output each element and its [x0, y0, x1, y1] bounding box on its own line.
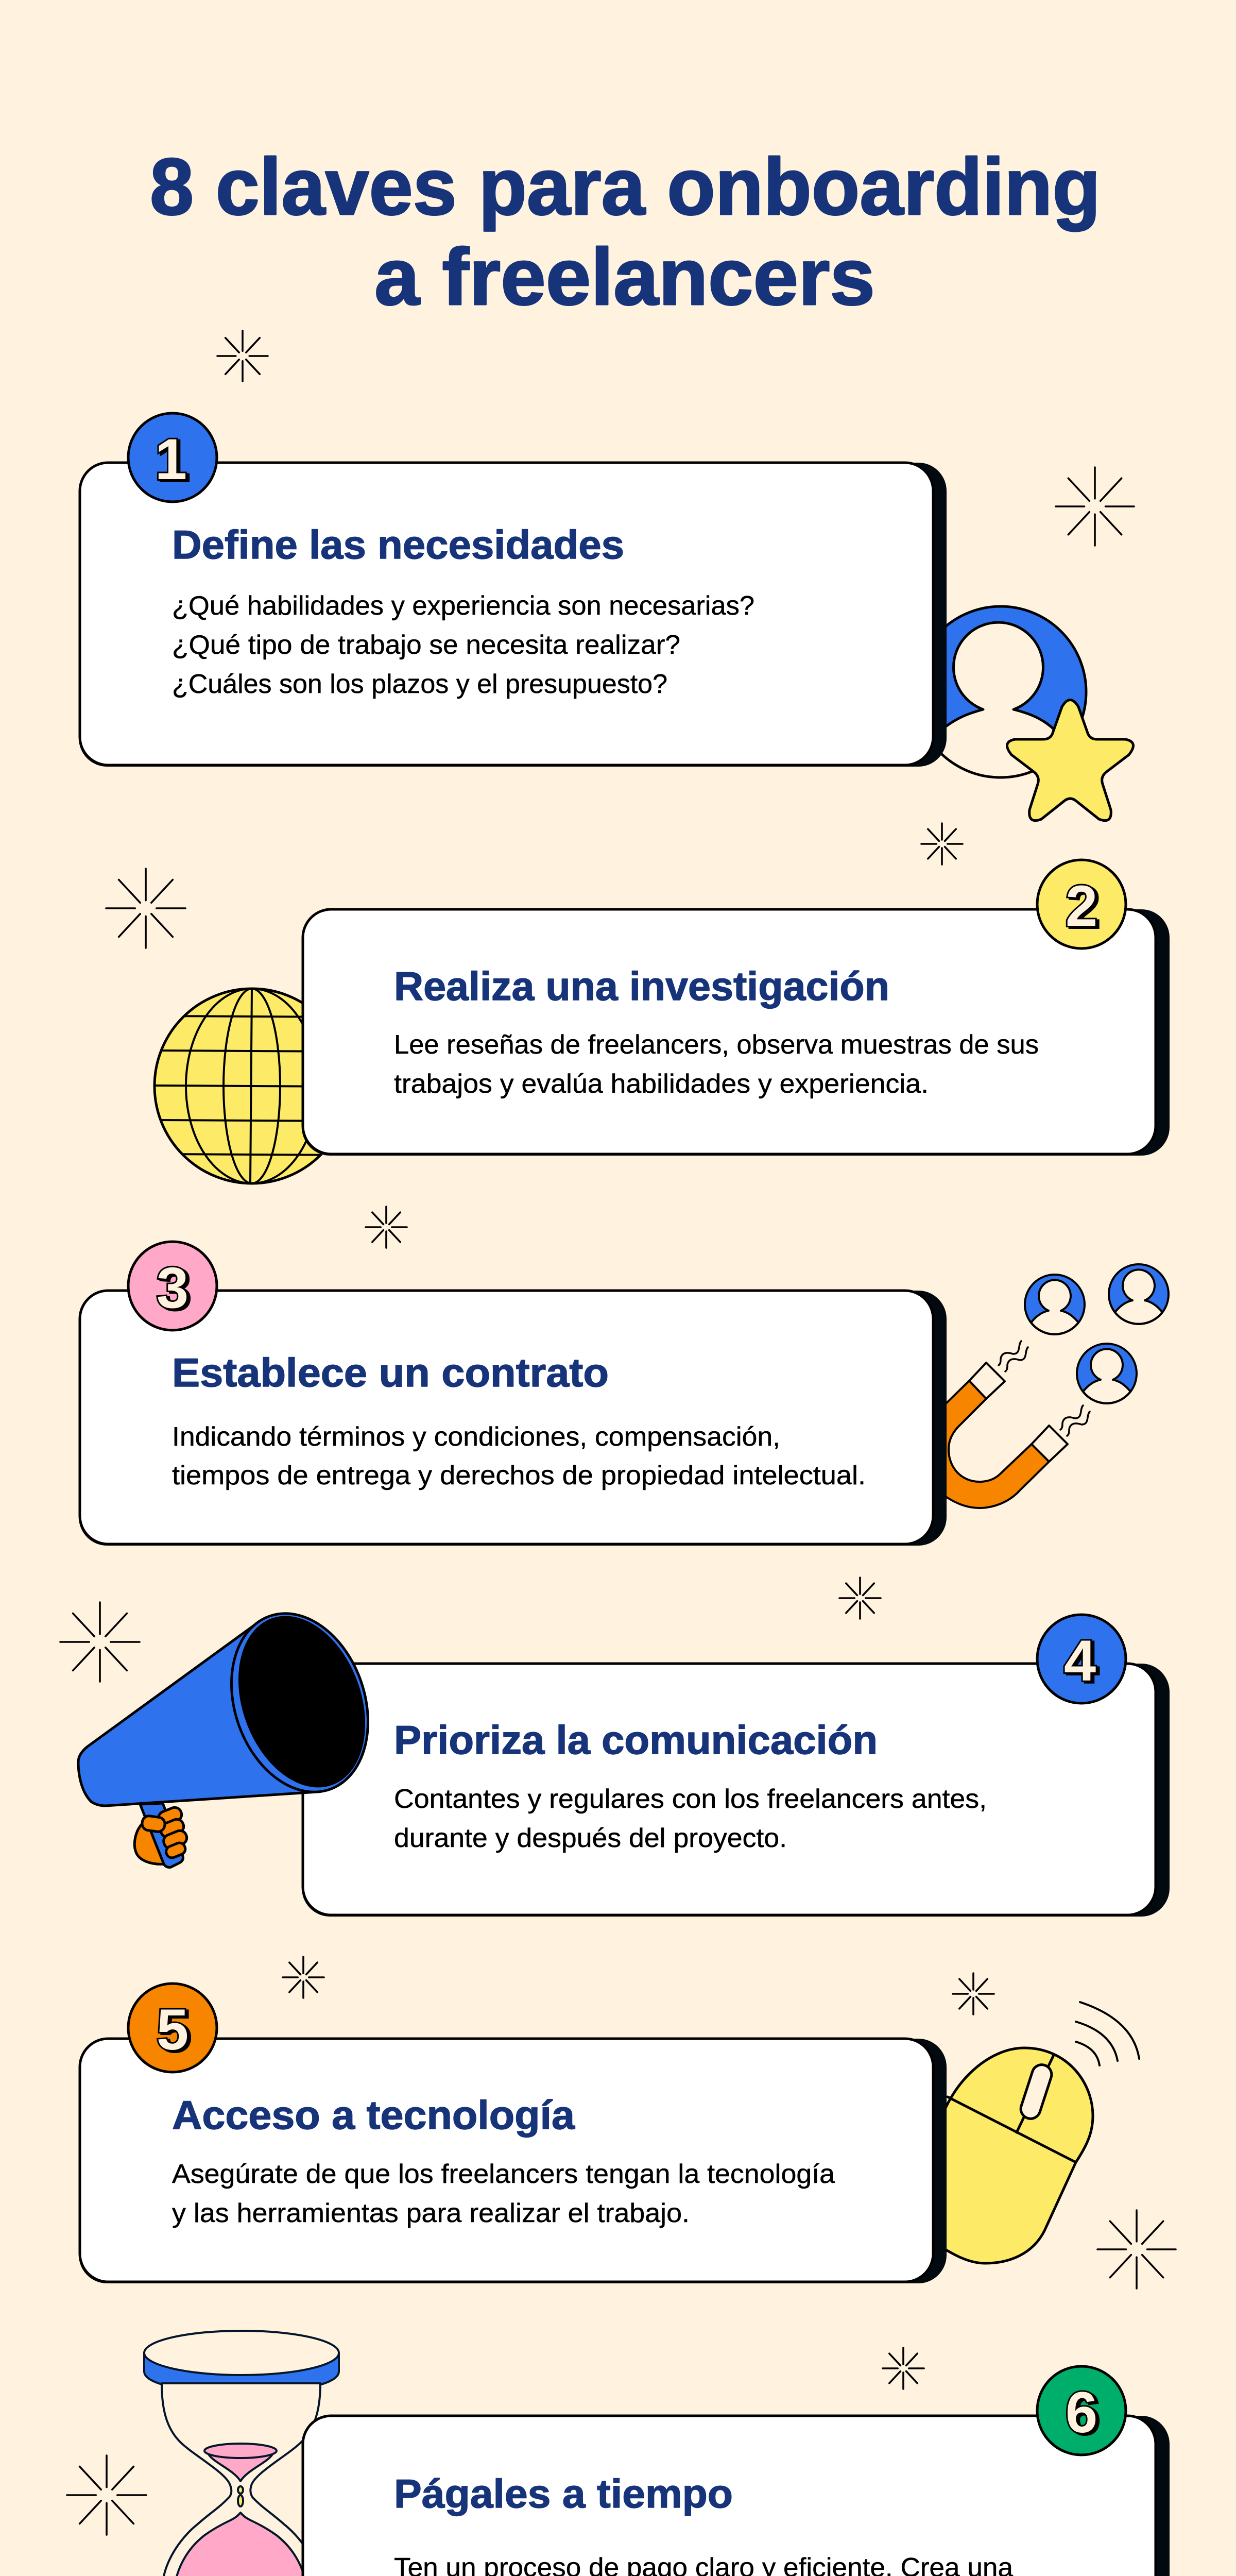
panel: step 3: tiempos de entrega y derechos de propiedad intelectual.	[172, 1461, 866, 1490]
panel: step 4: Contantes y regulares con los freelancers antes,	[394, 1784, 987, 1814]
panel: step 6	[302, 2366, 1170, 2576]
panel: step 2: Lee reseñas de freelancers, observa muestras de sus	[394, 1030, 1039, 1060]
icon: user avatar	[915, 606, 1086, 777]
panel: step 2: 2	[1066, 874, 1097, 938]
icon: hourglass	[144, 2331, 339, 2576]
panel: step 5: y las herramientas para realizar el trabajo.	[172, 2198, 690, 2228]
panel: step 2	[302, 860, 1170, 1156]
panel: step 1: ¿Qué tipo de trabajo se necesita realizar?	[172, 630, 680, 660]
panel: step 4: 4	[1064, 1629, 1096, 1693]
title	[150, 142, 1101, 322]
panel: step 3: Establece un contrato	[172, 1350, 609, 1395]
panel: step 4: Prioriza la comunicación	[394, 1717, 878, 1762]
panel: step 1: ¿Qué habilidades y experiencia son necesarias?	[172, 591, 754, 621]
title: a freelancers	[374, 232, 875, 322]
icon: globe	[153, 987, 323, 1185]
panel: step 2: Realiza una investigación	[394, 963, 889, 1009]
panel: step 2: trabajos y evalúa habilidades y experiencia.	[394, 1069, 929, 1099]
icon: computer mouse	[940, 2002, 1139, 2263]
panel: step 4	[302, 1615, 1170, 1917]
panel: step 1: 1	[155, 427, 187, 492]
panel: step 4: durante y después del proyecto.	[394, 1823, 787, 1853]
icon: star	[1007, 700, 1134, 821]
panel: step 3	[79, 1242, 947, 1546]
icon: magnet	[922, 1341, 1090, 1508]
icon: sparkles	[60, 331, 1176, 2576]
panel: step 6: Págales a tiempo	[394, 2471, 733, 2516]
title: 8 claves para onboarding	[150, 142, 1101, 232]
panel: step 3: Indicando términos y condiciones, compensación,	[172, 1422, 780, 1452]
panel: step 5: 5	[157, 1997, 188, 2062]
panel: step 1: ¿Cuáles son los plazos y el presupuesto?	[172, 669, 667, 699]
panel: step 5	[79, 1984, 947, 2283]
panel: step 3: 3	[157, 1256, 188, 1320]
panel: step 5: Asegúrate de que los freelancers tengan la tecnología	[172, 2159, 835, 2189]
panel: step 6: 6	[1066, 2380, 1097, 2445]
panel: step 1: Define las necesidades	[172, 522, 624, 567]
icon: three user avatars	[1025, 1264, 1169, 1403]
panel: step 1	[79, 413, 947, 767]
panel: step 5: Acceso a tecnología	[172, 2092, 575, 2138]
icon: megaphone	[78, 1595, 391, 1868]
